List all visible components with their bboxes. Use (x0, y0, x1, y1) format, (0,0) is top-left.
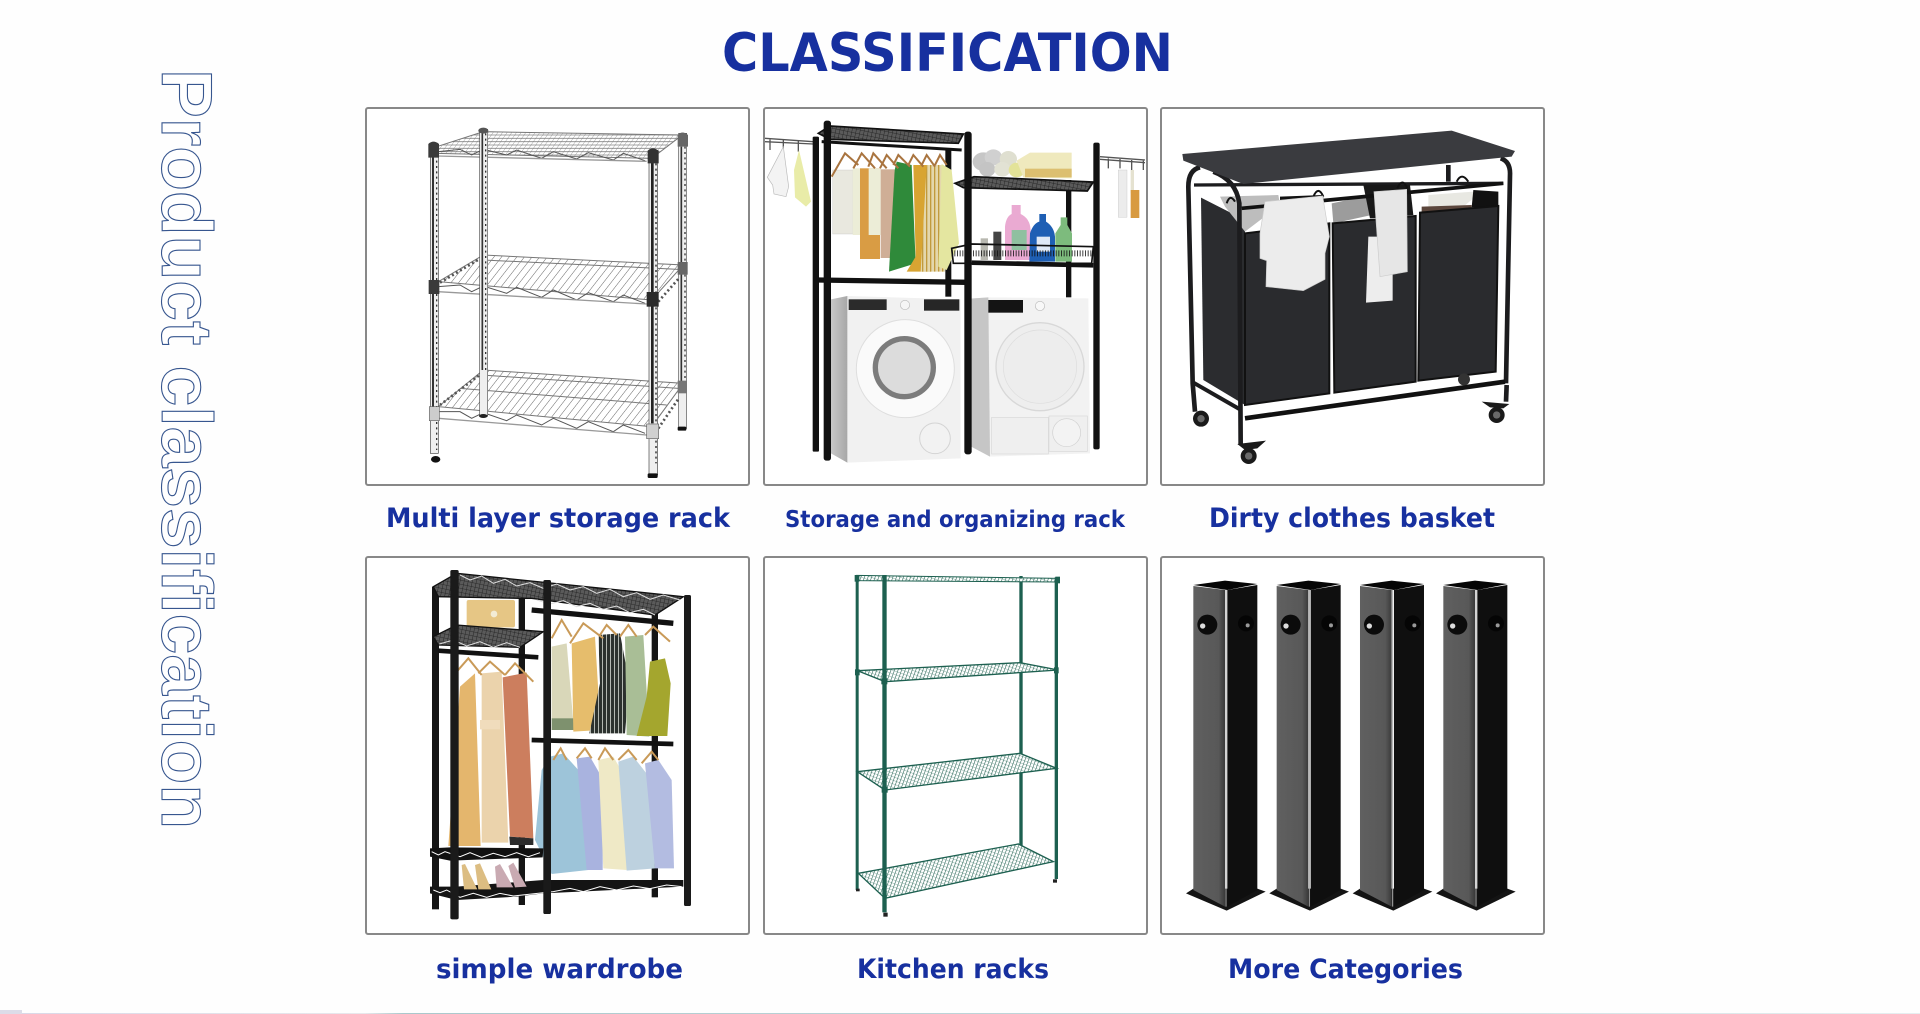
bag fronts (1245, 206, 1498, 405)
lower shirts right (535, 748, 674, 874)
rear frame (813, 137, 1071, 452)
shoes (462, 863, 527, 889)
top shelf and rod (818, 126, 963, 150)
bottom shelf (858, 844, 1053, 898)
post 2 (1269, 581, 1349, 911)
hanging clothes (832, 153, 959, 272)
dresses left (448, 658, 533, 846)
hanging towels and brushes (767, 147, 1139, 218)
bottles (981, 205, 1072, 262)
towels on shelf (973, 149, 1072, 178)
panel: multi layer storage rack (366, 108, 749, 485)
wheels (1193, 373, 1509, 464)
front posts (855, 575, 1060, 912)
panel: simple wardrobe (366, 557, 749, 934)
lower shelves (430, 847, 683, 900)
rear posts (856, 575, 1023, 890)
title: CLASSIFICATION (722, 23, 1173, 84)
post 1 (1186, 581, 1266, 911)
label: more categories: More Categories (1228, 954, 1463, 985)
panel: dirty clothes basket (1161, 108, 1544, 485)
label: kitchen racks: Kitchen racks (857, 954, 1049, 985)
back frame (1188, 158, 1510, 412)
left bag side (1201, 198, 1245, 405)
front frame (1213, 172, 1507, 445)
middle shelf (818, 280, 967, 282)
third shelf (857, 753, 1057, 790)
shelf bottom (438, 370, 683, 435)
hanging rods (438, 610, 673, 744)
post 3 (1353, 581, 1432, 911)
dryer (970, 297, 1090, 457)
label: storage and organizing rack: Storage and organizing rack (785, 507, 1126, 533)
label: simple wardrobe: simple wardrobe (436, 954, 683, 985)
panel: more categories (1161, 557, 1544, 934)
second shelf (857, 663, 1058, 682)
panel: storage and organizing rack (764, 108, 1147, 485)
post 4 (1436, 581, 1516, 911)
upper clothes right (552, 620, 671, 737)
laundry inside bags (1220, 185, 1498, 232)
label: multi layer storage rack: Multi layer storage rack (386, 503, 731, 534)
rear posts (432, 587, 658, 909)
panel: kitchen racks (764, 557, 1147, 934)
top shelf (433, 573, 683, 615)
purse (467, 600, 515, 627)
basket shelf (952, 244, 1093, 265)
top shelf (857, 575, 1058, 582)
posts (428, 128, 688, 478)
rods and handles (1227, 177, 1505, 418)
towels (1260, 189, 1407, 303)
feet (856, 879, 1057, 917)
label: dirty clothes basket: Dirty clothes basket (1209, 503, 1495, 534)
vertical heading: product classification: Product classification (146, 69, 225, 829)
table top (1182, 131, 1515, 184)
small shelf (433, 625, 543, 647)
front posts (450, 570, 691, 919)
side hook rails (765, 138, 1145, 170)
front posts (824, 121, 1100, 461)
upper right shelf (955, 177, 1093, 191)
washer (831, 296, 961, 463)
shelf middle (438, 255, 683, 304)
shelf top (437, 132, 682, 161)
